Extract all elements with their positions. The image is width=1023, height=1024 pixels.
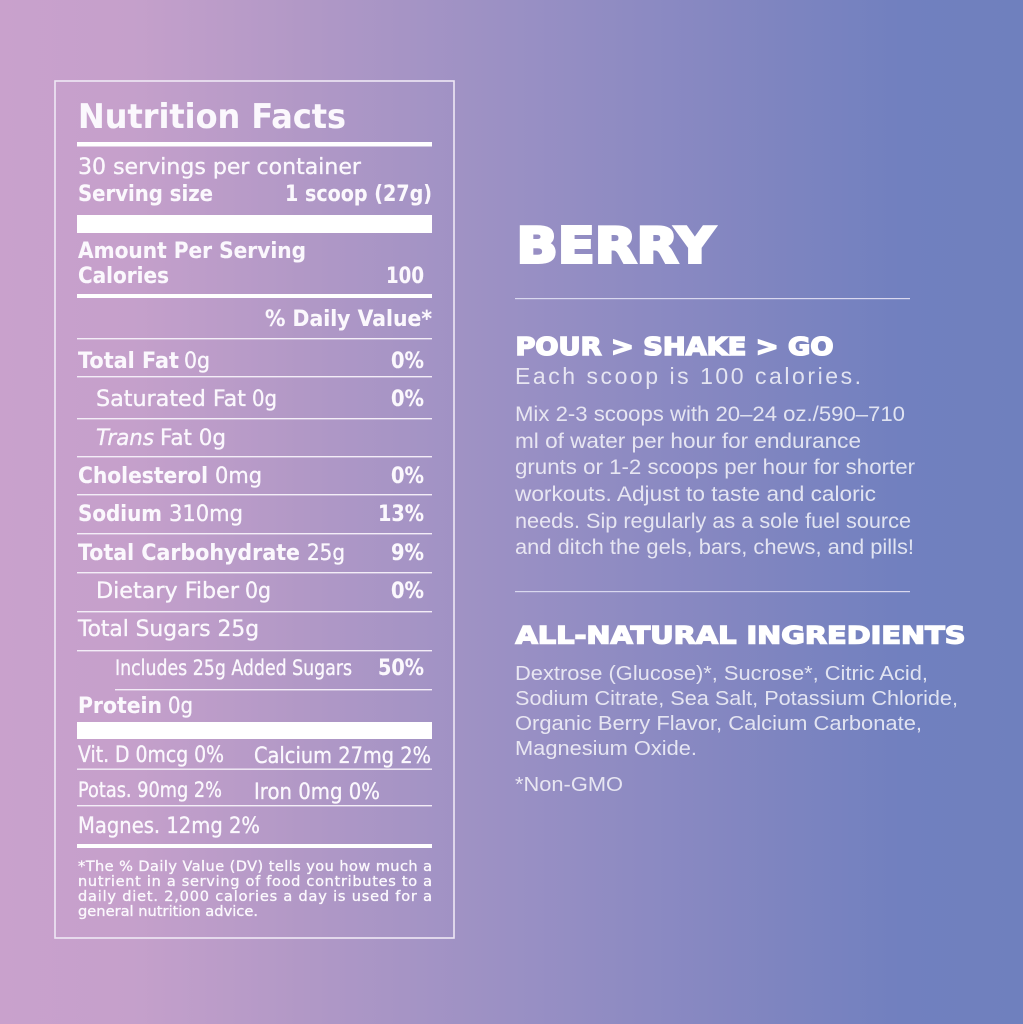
row: total sugars: Total Sugars 25g — [77, 617, 259, 642]
footnote: nutrient in a serving of food contributes to a — [78, 874, 432, 890]
calories row: 100 — [386, 264, 424, 289]
row: total fat: 0g — [184, 349, 210, 374]
text block: mixing directions: and ditch the gels, bars, chews, and pills! — [515, 536, 914, 559]
serving size row: Serving size — [78, 182, 213, 207]
row: cholesterol: Cholesterol — [78, 464, 208, 489]
row: saturated fat: 0g — [252, 387, 277, 412]
row: protein: Protein — [78, 694, 162, 719]
serving size row — [78, 182, 432, 207]
footnote: *The % Daily Value (DV) tells you how much a — [78, 859, 432, 875]
text block: ingredients list — [515, 663, 958, 760]
row: total carbohydrate: 9% — [391, 541, 424, 566]
row: sodium: 310mg — [169, 502, 243, 527]
heading: Nutrition Facts: Nutrition Facts — [78, 97, 346, 137]
row: dietary fiber — [96, 579, 424, 604]
row: dietary fiber: Dietary Fiber — [96, 579, 240, 604]
row: potassium and iron — [78, 778, 380, 805]
text block: mixing directions — [514, 403, 915, 559]
row: vitamin D and calcium: Calcium 27mg 2% — [254, 744, 431, 769]
row: saturated fat: 0% — [391, 387, 424, 412]
row: vitamin D and calcium — [78, 743, 431, 769]
row: dietary fiber: 0g — [245, 579, 271, 604]
footnote — [78, 859, 432, 920]
row: sodium — [78, 502, 424, 527]
title: BERRY: BERRY — [516, 218, 715, 274]
serving size row: 1 scoop (27g) — [285, 182, 432, 207]
heading: all-natural ingredients: ALL-NATURAL INGREDIENTS — [516, 622, 966, 650]
row: total carbohydrate: Total Carbohydrate — [78, 541, 300, 566]
row: total fat: Total Fat — [78, 349, 179, 374]
row: total carbohydrate: 25g — [307, 541, 345, 566]
row: cholesterol: 0mg — [215, 464, 262, 489]
row: potassium and iron: Iron 0mg 0% — [254, 780, 380, 805]
amount per serving: Amount Per Serving — [78, 239, 306, 264]
row: potassium and iron: Potas. 90mg 2% — [78, 778, 222, 802]
text block: ingredients list: Dextrose (Glucose)*, Sucrose*, Citric Acid, — [515, 663, 928, 685]
row: vitamin D and calcium: Vit. D 0mcg 0% — [78, 743, 224, 768]
calories row — [78, 264, 424, 289]
row: added sugars: Includes 25g Added Sugars — [115, 656, 352, 680]
text block: mixing directions: workouts. Adjust to taste and caloric — [514, 483, 876, 506]
text block: ingredients list: Sodium Citrate, Sea Salt, Potassium Chloride, — [515, 688, 958, 710]
row: trans fat: Trans — [96, 426, 154, 451]
row: protein: 0g — [168, 694, 193, 719]
servings per container: 30 servings per container — [78, 155, 362, 180]
note: non-GMO: *Non-GMO — [515, 774, 623, 796]
row: dietary fiber: 0% — [391, 579, 424, 604]
panel: nutrition facts label — [55, 81, 454, 938]
row: total carbohydrate — [78, 541, 424, 566]
row: trans fat: Fat 0g — [160, 426, 226, 451]
calories row: Calories — [78, 264, 169, 289]
heading: pour shake go: POUR > SHAKE > GO — [516, 332, 834, 361]
subheading: scoop calories: Each scoop is 100 calories. — [515, 363, 861, 389]
footnote: general nutrition advice. — [78, 904, 258, 920]
text block: mixing directions: grunts or 1-2 scoops per hour for shorter — [515, 456, 915, 479]
daily value header: % Daily Value* — [265, 307, 432, 332]
row: saturated fat — [96, 387, 424, 412]
row: trans fat — [96, 426, 226, 451]
row: cholesterol — [78, 464, 424, 489]
row: total fat: 0% — [391, 349, 424, 374]
row: total fat — [78, 349, 424, 374]
text block: mixing directions: Mix 2-3 scoops with 20–24 oz./590–710 — [515, 403, 905, 426]
text block: mixing directions: needs. Sip regularly as a sole fuel source — [515, 510, 911, 533]
row: cholesterol: 0% — [391, 464, 424, 489]
row: magnesium: Magnes. 12mg 2% — [78, 814, 260, 839]
row: saturated fat: Saturated Fat — [96, 387, 246, 412]
text block: ingredients list: Magnesium Oxide. — [515, 738, 697, 760]
row: sodium: 13% — [378, 502, 424, 527]
footnote: daily diet. 2,000 calories a day is used for a — [78, 889, 432, 905]
row: sodium: Sodium — [78, 502, 162, 527]
text block: mixing directions: ml of water per hour for endurance — [515, 430, 861, 453]
row: added sugars: 50% — [378, 656, 424, 681]
text block: ingredients list: Organic Berry Flavor, Calcium Carbonate, — [515, 713, 922, 735]
